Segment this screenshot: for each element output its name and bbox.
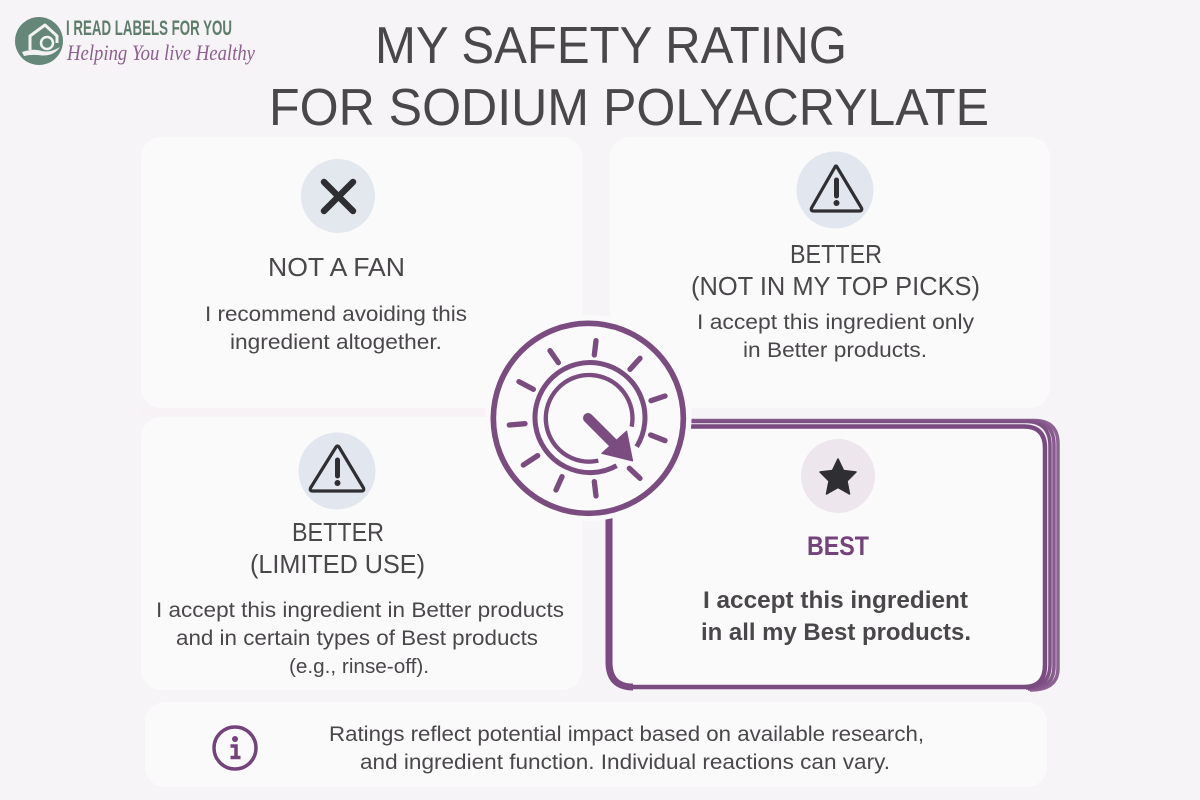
heading: better limited use [250, 517, 425, 579]
icon: warning triangle [796, 152, 874, 228]
heading: best: BEST [807, 531, 869, 561]
heading: better limited use: (LIMITED USE) [250, 549, 425, 579]
title: MY SAFETY RATING [375, 17, 847, 75]
logo: Helping You live Healthy [66, 40, 255, 65]
icon: star [801, 439, 875, 513]
text: disclaimer: and ingredient function. Individual reactions can vary. [360, 751, 890, 774]
text: best description: in all my Best products. [701, 619, 971, 646]
icon: x mark [301, 159, 375, 233]
text: limited use description: I accept this ingredient in Better products [156, 599, 564, 622]
heading: better not in my top picks [691, 239, 980, 301]
text: best description [701, 587, 971, 646]
panel: not a fan [141, 137, 582, 408]
text: limited use description [156, 599, 564, 678]
text: better description [697, 311, 975, 362]
text: disclaimer [329, 723, 924, 774]
text: disclaimer: Ratings reflect potential impact based on available research, [329, 723, 924, 746]
dial icon [486, 315, 692, 521]
text: better description: in Better products. [743, 339, 927, 362]
icon: warning triangle [298, 432, 376, 510]
text: not a fan description: I recommend avoiding this [205, 303, 467, 326]
heading: better limited use: BETTER [292, 517, 384, 547]
heading: better not in my top picks: (NOT IN MY TOP PICKS) [691, 271, 980, 301]
panel: better limited use [141, 417, 582, 690]
heading: better not in my top picks: BETTER [790, 239, 882, 269]
icon: info [214, 727, 256, 769]
text: best description: I accept this ingredient [703, 587, 968, 614]
logo: I READ LABELS FOR YOU [66, 17, 232, 40]
heading: not a fan: NOT A FAN [268, 252, 405, 282]
title [269, 17, 989, 137]
text: not a fan description [205, 303, 467, 354]
text: not a fan description: ingredient altogether. [230, 331, 442, 354]
title: FOR SODIUM POLYACRYLATE [269, 79, 989, 137]
panel: best [609, 420, 1058, 690]
panel: better not in top picks [610, 137, 1050, 408]
text: better description: I accept this ingredient only [697, 311, 975, 334]
logo [15, 17, 255, 65]
panel: disclaimer [145, 702, 1047, 787]
text: limited use description: (e.g., rinse-off). [289, 656, 429, 678]
text: limited use description: and in certain types of Best products [176, 627, 538, 650]
